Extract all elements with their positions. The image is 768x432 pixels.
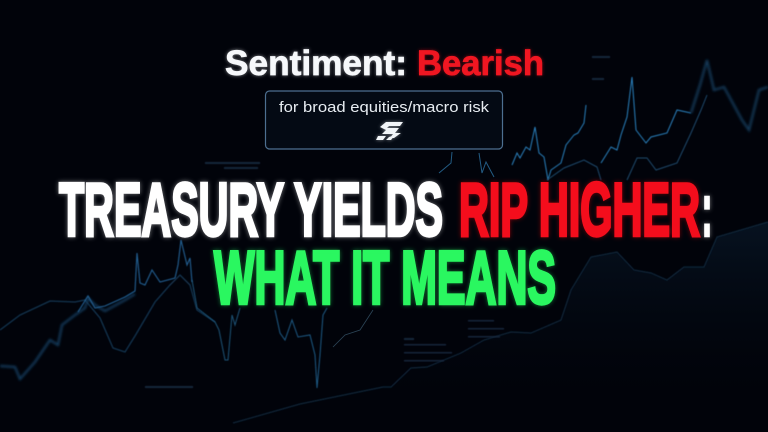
chart: area series lower right: [233, 222, 768, 432]
sentiment heading: Sentiment:: [225, 44, 407, 83]
chart: blurred price series, far right: [691, 60, 768, 130]
chart: price series, upper right: [512, 105, 586, 180]
chart: price series, left: [78, 240, 192, 312]
chart: blurred moving average, left: [0, 275, 215, 352]
chart: price series behind box: [439, 152, 494, 177]
chart: price series, center: [275, 308, 327, 388]
chart: price series, center-left: [192, 280, 240, 360]
icon: S logo: [376, 122, 403, 140]
faint data labels: [145, 56, 610, 388]
infographic canvas: :: [702, 168, 712, 252]
chart: moving average, upper right: [547, 95, 707, 180]
sentiment heading: Bearish: [417, 44, 544, 83]
chart: thin line, center: [333, 310, 373, 347]
chart: blurred price series, far left: [0, 294, 135, 379]
qualifier text: for broad equities/macro risk: [279, 99, 490, 116]
main title line 1: TREASURY YIELDS: [59, 168, 443, 252]
sentiment heading: [225, 44, 544, 83]
qualifier box: [266, 91, 502, 149]
